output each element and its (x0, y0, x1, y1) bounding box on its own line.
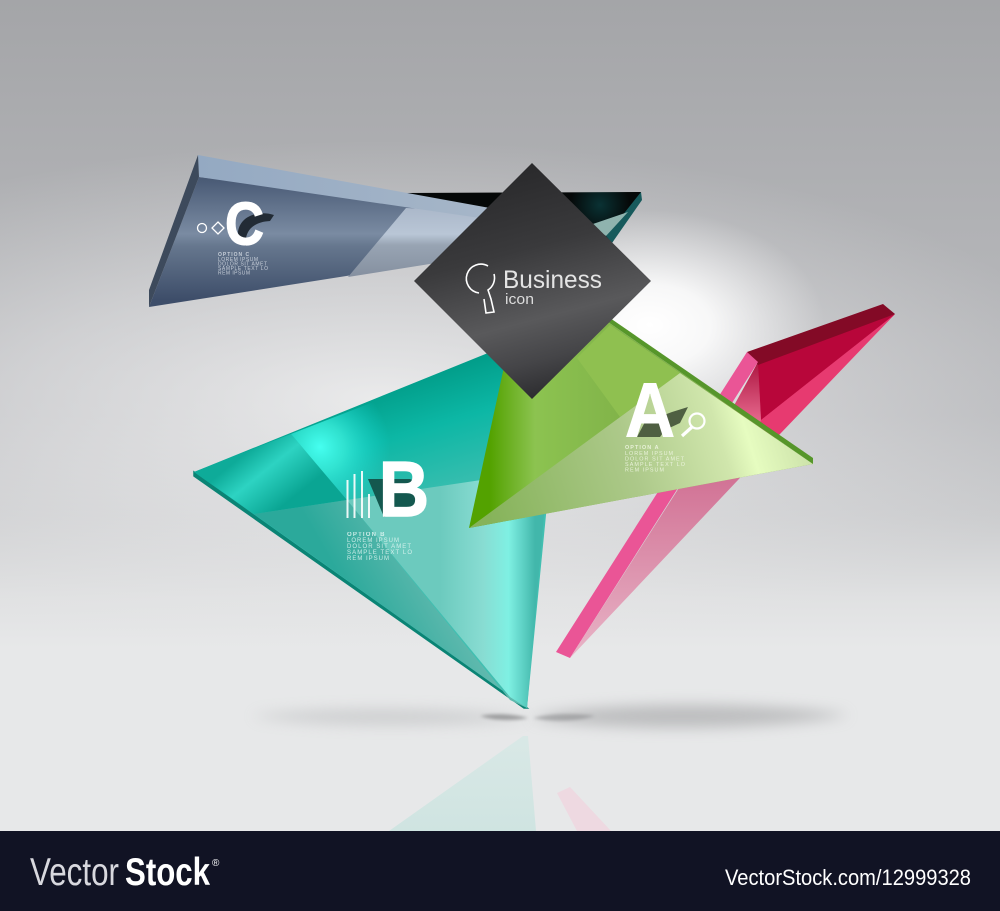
text: option C: LOREM IPSUM (218, 257, 258, 263)
text: option B: DOLOR SIT AMET (347, 544, 411, 550)
text: option A: LOREM IPSUM (625, 451, 674, 457)
text: option C: OPTION C (218, 252, 250, 258)
floor shadow (250, 705, 850, 728)
reflection: pink triangle (557, 787, 611, 831)
text: option B: OPTION B (347, 532, 386, 538)
letter C: C (225, 190, 264, 258)
logo: VectorStock: ® (212, 858, 220, 869)
letter B: B (379, 445, 429, 533)
footer bar (0, 831, 1000, 911)
text: option B: REM IPSUM (347, 556, 389, 562)
text: option A: DOLOR SIT AMET (625, 456, 685, 462)
text: option A (625, 445, 685, 474)
text: option B (347, 532, 412, 562)
panel: pink triangle (556, 304, 895, 658)
icon: magnifier (682, 414, 704, 436)
panel: option A green triangle (469, 318, 813, 528)
icon: circle and diamond (198, 222, 224, 234)
text: option C: REM IPSUM (218, 270, 250, 276)
reflection: teal triangle (389, 736, 536, 831)
text: Business: Business (503, 266, 602, 294)
logo: VectorStock: Stock (125, 851, 210, 894)
letter shadow C (238, 213, 274, 246)
text: option A: SAMPLE TEXT LO (625, 462, 685, 468)
panel: option B teal triangle (194, 340, 553, 708)
panel: option C triangle (149, 155, 490, 307)
text: option B: SAMPLE TEXT LO (347, 550, 412, 556)
text: option A: OPTION A (625, 445, 660, 451)
text: image id: VectorStock.com/12999328 (725, 865, 971, 890)
icon: vertical bars (346, 471, 370, 518)
text: option B: LOREM IPSUM (347, 538, 399, 544)
letter shadow B (368, 479, 416, 517)
text: option C: SAMPLE TEXT LO (218, 266, 268, 272)
logo: VectorStock: Vector (30, 851, 119, 894)
panel: business diamond (414, 163, 651, 399)
text: icon: icon (505, 291, 534, 308)
text: option C: DOLOR SIT AMET (218, 262, 267, 268)
text: option C (218, 252, 268, 276)
letter shadow A (637, 407, 688, 437)
letter A: A (625, 368, 675, 454)
black back triangle (405, 192, 642, 243)
text: option A: REM IPSUM (625, 468, 664, 474)
logo: VectorStock (30, 851, 220, 894)
icon: bulb key (466, 264, 495, 313)
